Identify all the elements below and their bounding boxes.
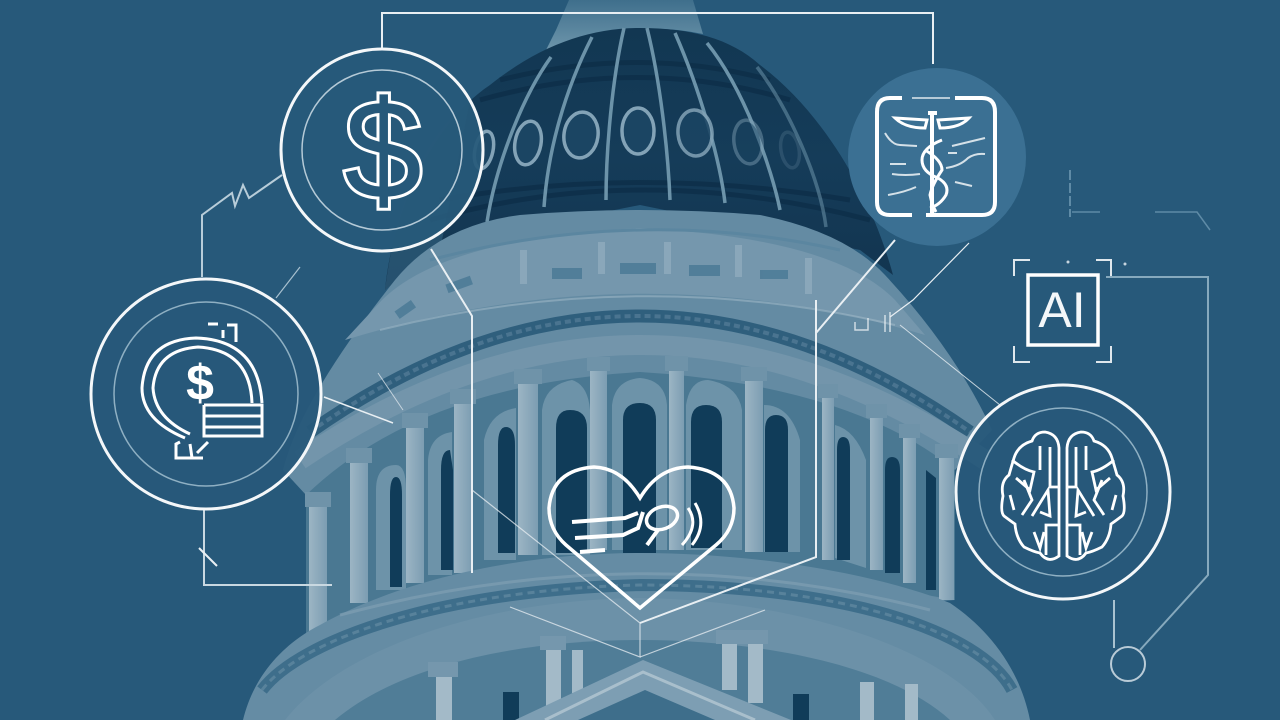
pediment [515, 660, 791, 720]
dome lantern neck [546, 0, 703, 50]
capitol building [243, 0, 1030, 720]
colonnade [305, 356, 958, 640]
small dollar: $ [186, 355, 214, 411]
column capitals [305, 356, 958, 507]
entablature panels [395, 263, 788, 319]
icon: AI box [1014, 260, 1126, 362]
dome ribs [487, 28, 826, 227]
dark windows [390, 403, 936, 590]
dollar sign: $ [344, 71, 422, 228]
icon: money bag circle [91, 279, 321, 509]
icon: caduceus health circle [848, 68, 1026, 246]
dark cornice ledge [310, 316, 970, 432]
lower columns [436, 643, 918, 720]
upper entablature band [345, 228, 925, 340]
icon: heart [549, 467, 734, 608]
icon: brain circle [956, 385, 1170, 599]
drum silhouette [283, 210, 992, 640]
connector lines [199, 13, 1210, 657]
dome [385, 28, 893, 290]
columns [309, 370, 954, 633]
AI label: AI [1038, 282, 1086, 338]
arch surrounds [376, 378, 866, 590]
node circle [1111, 647, 1145, 681]
icon: dollar coin circle [281, 49, 483, 251]
lower cornice [243, 553, 1030, 720]
lower drum soffit [285, 598, 995, 720]
dome windows [471, 108, 802, 170]
